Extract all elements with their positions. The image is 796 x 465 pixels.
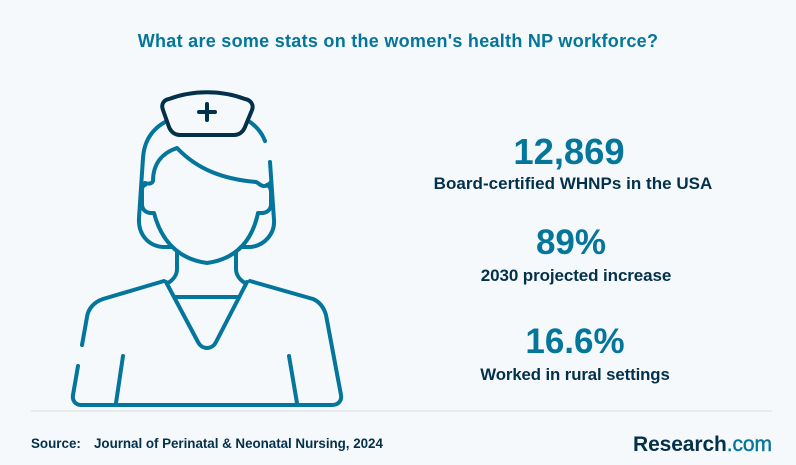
label: board-certified: Board-certified WHNPs in the USA (434, 174, 712, 193)
stat: rural settings (480, 322, 670, 384)
text: Journal of Perinatal & Neonatal Nursing, 2024 (94, 436, 383, 451)
label: projected increase: 2030 projected increase (481, 266, 671, 285)
number: 12,869: 12,869 (513, 131, 625, 172)
divider (31, 410, 772, 412)
number: 89%: 89% (536, 223, 606, 262)
number: 16.6%: 16.6% (525, 322, 625, 361)
source: Source: (31, 436, 81, 451)
source (31, 436, 383, 451)
label: rural settings: Worked in rural settings (480, 365, 670, 384)
stat: board-certified WHNPs (434, 131, 712, 193)
title: What are some stats on the women's health NP workforce? (138, 31, 658, 51)
logo: Research.com: Research.com (633, 433, 772, 456)
stat: projected increase (481, 223, 671, 285)
